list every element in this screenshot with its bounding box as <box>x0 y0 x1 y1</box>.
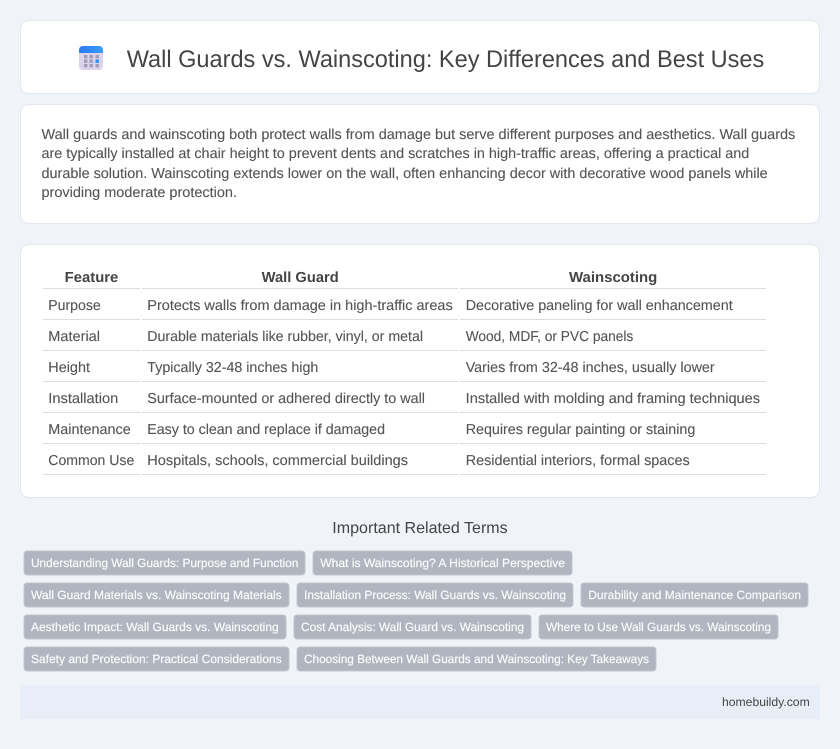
row: material: Material <box>48 329 100 345</box>
table header row <box>65 270 657 286</box>
tag: cost analysis: Cost Analysis: Wall Guard vs. Wainscoting <box>301 620 524 634</box>
row: installation: Installed with molding and framing techniques <box>466 391 760 407</box>
tag: choosing between <box>297 647 656 671</box>
tag: understanding wall guards <box>24 551 305 575</box>
panel: summary <box>20 104 820 224</box>
tag: installation process: Installation Process: Wall Guards vs. Wainscoting <box>304 588 566 602</box>
panel: comparison table <box>20 244 820 498</box>
row: common use <box>48 453 690 469</box>
tag: aesthetic impact: Aesthetic Impact: Wall Guards vs. Wainscoting <box>31 620 279 634</box>
footer <box>20 685 820 719</box>
tag: safety and protection: Safety and Protection: Practical Considerations <box>31 652 282 666</box>
row: purpose <box>48 298 733 314</box>
related term tags <box>24 551 808 671</box>
panel: header <box>20 20 820 94</box>
tag: safety and protection <box>24 647 289 671</box>
tag: installation process <box>297 583 573 607</box>
title: Wall Guards vs. Wainscoting: Key Differences and Best Uses <box>127 46 764 73</box>
row: installation: Installation <box>48 391 118 407</box>
row: height: Height <box>48 360 90 376</box>
tag: understanding wall guards: Understanding Wall Guards: Purpose and Function <box>31 556 298 570</box>
row: material: Wood, MDF, or PVC panels <box>466 329 633 345</box>
tag: materials: Wall Guard Materials vs. Wainscoting Materials <box>31 588 282 602</box>
row: maintenance: Requires regular painting or staining <box>466 422 695 438</box>
table header row: Feature <box>65 270 118 286</box>
tag: where to use <box>539 615 778 639</box>
summary text: are typically installed at chair height to prevent dents and scratches in high-traffic areas, offering a practical and <box>42 146 749 162</box>
summary text: providing moderate protection. <box>42 185 237 201</box>
table header row: Wall Guard <box>262 270 339 286</box>
row: purpose: Purpose <box>48 298 101 314</box>
table rules <box>43 288 766 475</box>
tag: choosing between: Choosing Between Wall Guards and Wainscoting: Key Takeaways <box>304 652 649 666</box>
row: maintenance: Maintenance <box>48 422 131 438</box>
tag: where to use: Where to Use Wall Guards vs. Wainscoting <box>546 620 771 634</box>
footer source: homebuildy.com <box>722 695 810 709</box>
tag: durability: Durability and Maintenance Comparison <box>588 588 801 602</box>
row: purpose: Decorative paneling for wall enhancement <box>466 298 733 314</box>
row: maintenance: Easy to clean and replace if damaged <box>147 422 385 438</box>
row: common use: Residential interiors, formal spaces <box>466 453 690 469</box>
heading: important related terms: Important Related Terms <box>332 520 508 537</box>
row: common use: Common Use <box>48 453 134 469</box>
row: material <box>48 329 633 345</box>
row: material: Durable materials like rubber, vinyl, or metal <box>147 329 423 345</box>
summary text: durable solution. Wainscoting extends lower on the wall, often enhancing decor with decorative wood panels while <box>42 166 768 182</box>
table header row: Wainscoting <box>569 270 657 286</box>
tag: aesthetic impact <box>24 615 286 639</box>
row: maintenance <box>48 422 695 438</box>
tag: what is wainscoting: What is Wainscoting? A Historical Perspective <box>320 556 565 570</box>
tag: durability <box>581 583 808 607</box>
summary text <box>42 127 795 201</box>
row: purpose: Protects walls from damage in high-traffic areas <box>147 298 453 314</box>
row: height: Typically 32-48 inches high <box>147 360 318 376</box>
row: height <box>48 360 715 376</box>
row: installation: Surface-mounted or adhered directly to wall <box>147 391 425 407</box>
row: installation <box>48 391 760 407</box>
summary text: Wall guards and wainscoting both protect walls from damage but serve different purposes and aesthetics. Wall guards <box>42 127 795 143</box>
row: height: Varies from 32-48 inches, usually lower <box>466 360 715 376</box>
tag: what is wainscoting <box>313 551 572 575</box>
icon: calendar <box>79 46 103 70</box>
tag: cost analysis <box>294 615 531 639</box>
row: common use: Hospitals, schools, commercial buildings <box>147 453 408 469</box>
tag: materials <box>24 583 289 607</box>
